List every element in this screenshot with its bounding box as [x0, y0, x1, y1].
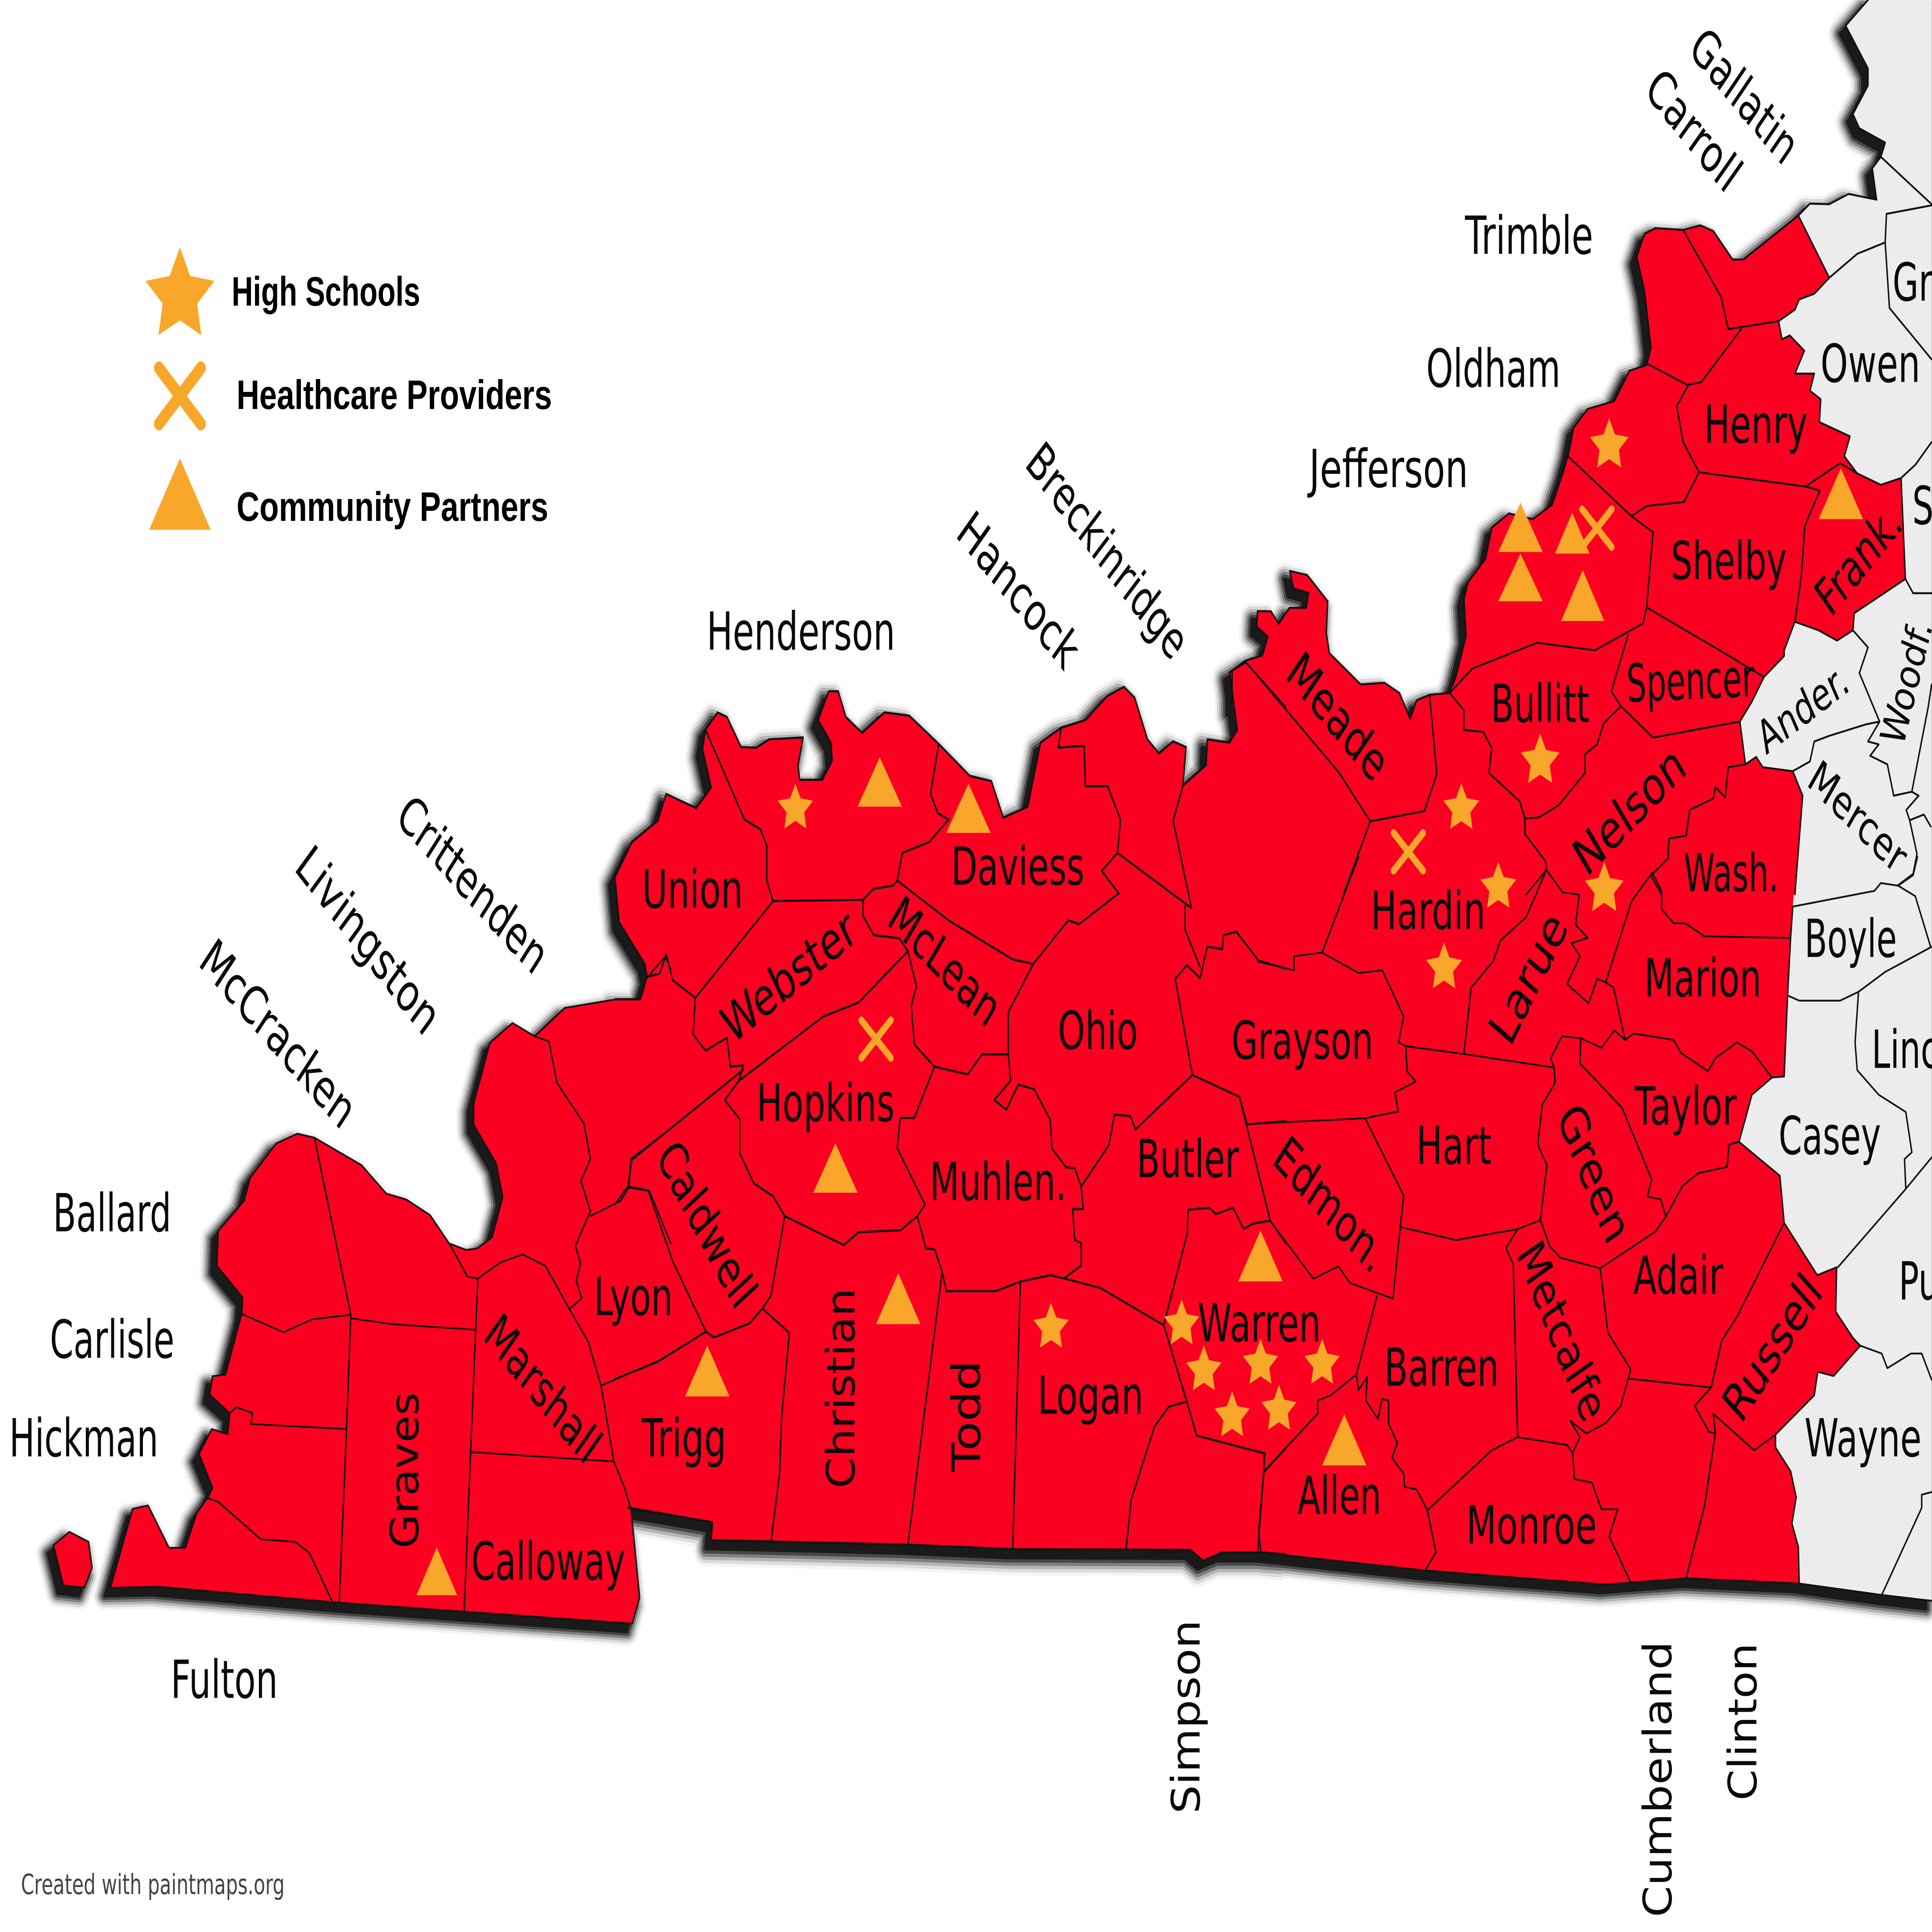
label: Allen: Allen [1298, 1465, 1381, 1527]
label: Marion: Marion [1644, 948, 1761, 1009]
star: Hardin 1 [1443, 783, 1479, 829]
county borders: southern counties [1257, 857, 1932, 1601]
footer credit: Created with paintmaps.org [21, 1869, 285, 1901]
label: Breckinridge: Breckinridge [1017, 431, 1197, 672]
star: Logan [1033, 1303, 1069, 1348]
label: Crittenden: Crittenden [388, 783, 557, 986]
triangle: Allen [1322, 1415, 1366, 1466]
label: Oldham: Oldham [1426, 338, 1561, 400]
label: Hardin: Hardin [1371, 881, 1485, 942]
label: Henry: Henry [1704, 394, 1808, 456]
label: Carroll: Carroll [1636, 56, 1751, 204]
star: Bullitt [1521, 734, 1560, 783]
label: Hickman: Hickman [9, 1408, 158, 1469]
label: Muhlen.: Muhlen. [930, 1151, 1066, 1213]
label: Spencer: Spencer [1626, 648, 1755, 715]
triangle: Warren [1238, 1231, 1283, 1281]
label: Cumberland: Cumberland [1635, 1641, 1681, 1917]
star: Henderson [778, 784, 813, 828]
county borders: central counties [615, 662, 1286, 1561]
label: Meade: Meade [1277, 640, 1398, 794]
star: Oldham [1590, 418, 1629, 468]
legend icon: star [145, 247, 214, 335]
map markers [417, 418, 1863, 1595]
label: Boyle: Boyle [1804, 908, 1897, 969]
label: Clinton: Clinton [1720, 1643, 1766, 1801]
label: Henderson: Henderson [707, 601, 895, 662]
star: Hardin 3 [1426, 942, 1462, 988]
star: Nelson [1585, 862, 1624, 911]
label: Adair: Adair [1633, 1245, 1723, 1306]
label: Owen: Owen [1820, 333, 1920, 395]
label: Simpson: Simpson [1163, 1620, 1209, 1814]
label: Warren: Warren [1197, 1293, 1321, 1354]
triangle: Trigg [685, 1345, 730, 1396]
label: Hart: Hart [1416, 1116, 1492, 1177]
label: Ander.: Ander. [1750, 652, 1855, 765]
triangle: Jefferson 4 [1561, 570, 1604, 621]
triangle: Graves [417, 1548, 457, 1595]
county borders: northern counties [1257, 0, 1932, 895]
county borders: Meade river bend [1232, 571, 1328, 708]
label: Fulton: Fulton [171, 1650, 278, 1711]
label: Green: Green [1548, 1094, 1640, 1253]
label: Mercer: Mercer [1801, 750, 1915, 884]
star: Warren 4 [1304, 1339, 1340, 1384]
triangle: Jefferson 1 [1498, 503, 1543, 552]
label: Union: Union [642, 859, 743, 920]
label: Webster: Webster [713, 898, 865, 1056]
label: McCracken: McCracken [191, 927, 365, 1141]
label: Butler: Butler [1137, 1129, 1239, 1190]
label: Larue: Larue [1480, 901, 1577, 1055]
triangle: Daviess [946, 784, 991, 833]
map: grey neighbouring counties [1730, 0, 1932, 1601]
legend text: High Schools: High Schools [231, 269, 420, 314]
triangle: Franklin [1819, 468, 1863, 519]
triangle: Jefferson 3 [1555, 513, 1590, 554]
star: Warren west [1164, 1299, 1199, 1344]
label: Hopkins: Hopkins [757, 1073, 895, 1134]
legend text: Healthcare Providers: Healthcare Providers [236, 372, 552, 418]
label: Metcalfe: Metcalfe [1507, 1231, 1616, 1431]
triangle: Henderson [857, 757, 902, 807]
label: Marshall: Marshall [475, 1302, 611, 1476]
label: Christian: Christian [818, 1288, 864, 1488]
map: red highlighted counties [53, 216, 1905, 1624]
label: Barren: Barren [1384, 1337, 1499, 1398]
star: Warren 5 [1214, 1391, 1250, 1436]
triangle: Hopkins [813, 1143, 857, 1193]
legend icon: triangle [149, 458, 211, 530]
label: Ohio: Ohio [1058, 1000, 1138, 1062]
label: Edmon.: Edmon. [1265, 1124, 1396, 1286]
label: Taylor: Taylor [1634, 1076, 1737, 1137]
legend text: Community Partners: Community Partners [236, 484, 548, 529]
label: Trigg: Trigg [641, 1408, 726, 1469]
star: Hardin 2 [1480, 862, 1516, 908]
label: Bullitt: Bullitt [1491, 673, 1590, 735]
cross: Hardin healthcare [1394, 833, 1423, 871]
label: Jefferson: Jefferson [1307, 439, 1468, 500]
label: Russell: Russell [1713, 1262, 1832, 1434]
label: Lyon: Lyon [594, 1267, 673, 1328]
cross: Jefferson healthcare [1582, 509, 1612, 547]
label: Calloway: Calloway [471, 1531, 625, 1592]
label: Caldwell: Caldwell [647, 1129, 766, 1320]
label: Graves: Graves [382, 1392, 428, 1548]
star: Warren 3 [1243, 1339, 1278, 1384]
label: McLean: McLean [879, 884, 1010, 1039]
label: Gallatin: Gallatin [1681, 15, 1808, 177]
star: Warren 2 [1186, 1345, 1221, 1390]
label: Logan: Logan [1037, 1365, 1143, 1426]
label: Carlisle: Carlisle [50, 1309, 174, 1371]
label: Casey: Casey [1779, 1105, 1881, 1167]
label: Frank.: Frank. [1806, 491, 1911, 628]
label: Wash.: Wash. [1684, 843, 1779, 904]
label: Shelby: Shelby [1671, 531, 1787, 592]
triangle: Christian [876, 1273, 920, 1324]
label: Livingston: Livingston [286, 834, 449, 1047]
label: Daviess: Daviess [951, 836, 1084, 897]
label: Monroe: Monroe [1466, 1495, 1597, 1556]
legend [145, 247, 552, 530]
legend icon: cross [159, 368, 201, 424]
star: Warren 6 [1261, 1385, 1296, 1430]
label: Trimble: Trimble [1465, 205, 1593, 267]
triangle: Jefferson 2 [1498, 554, 1543, 601]
cross: Hopkins healthcare [861, 1020, 891, 1058]
county borders: western counties [53, 957, 671, 1624]
label: Todd: Todd [944, 1360, 990, 1473]
label: Grayson: Grayson [1231, 1010, 1373, 1071]
label: Hancock: Hancock [948, 500, 1089, 681]
label: Nelson: Nelson [1564, 733, 1694, 888]
label: Ballard: Ballard [53, 1183, 171, 1244]
